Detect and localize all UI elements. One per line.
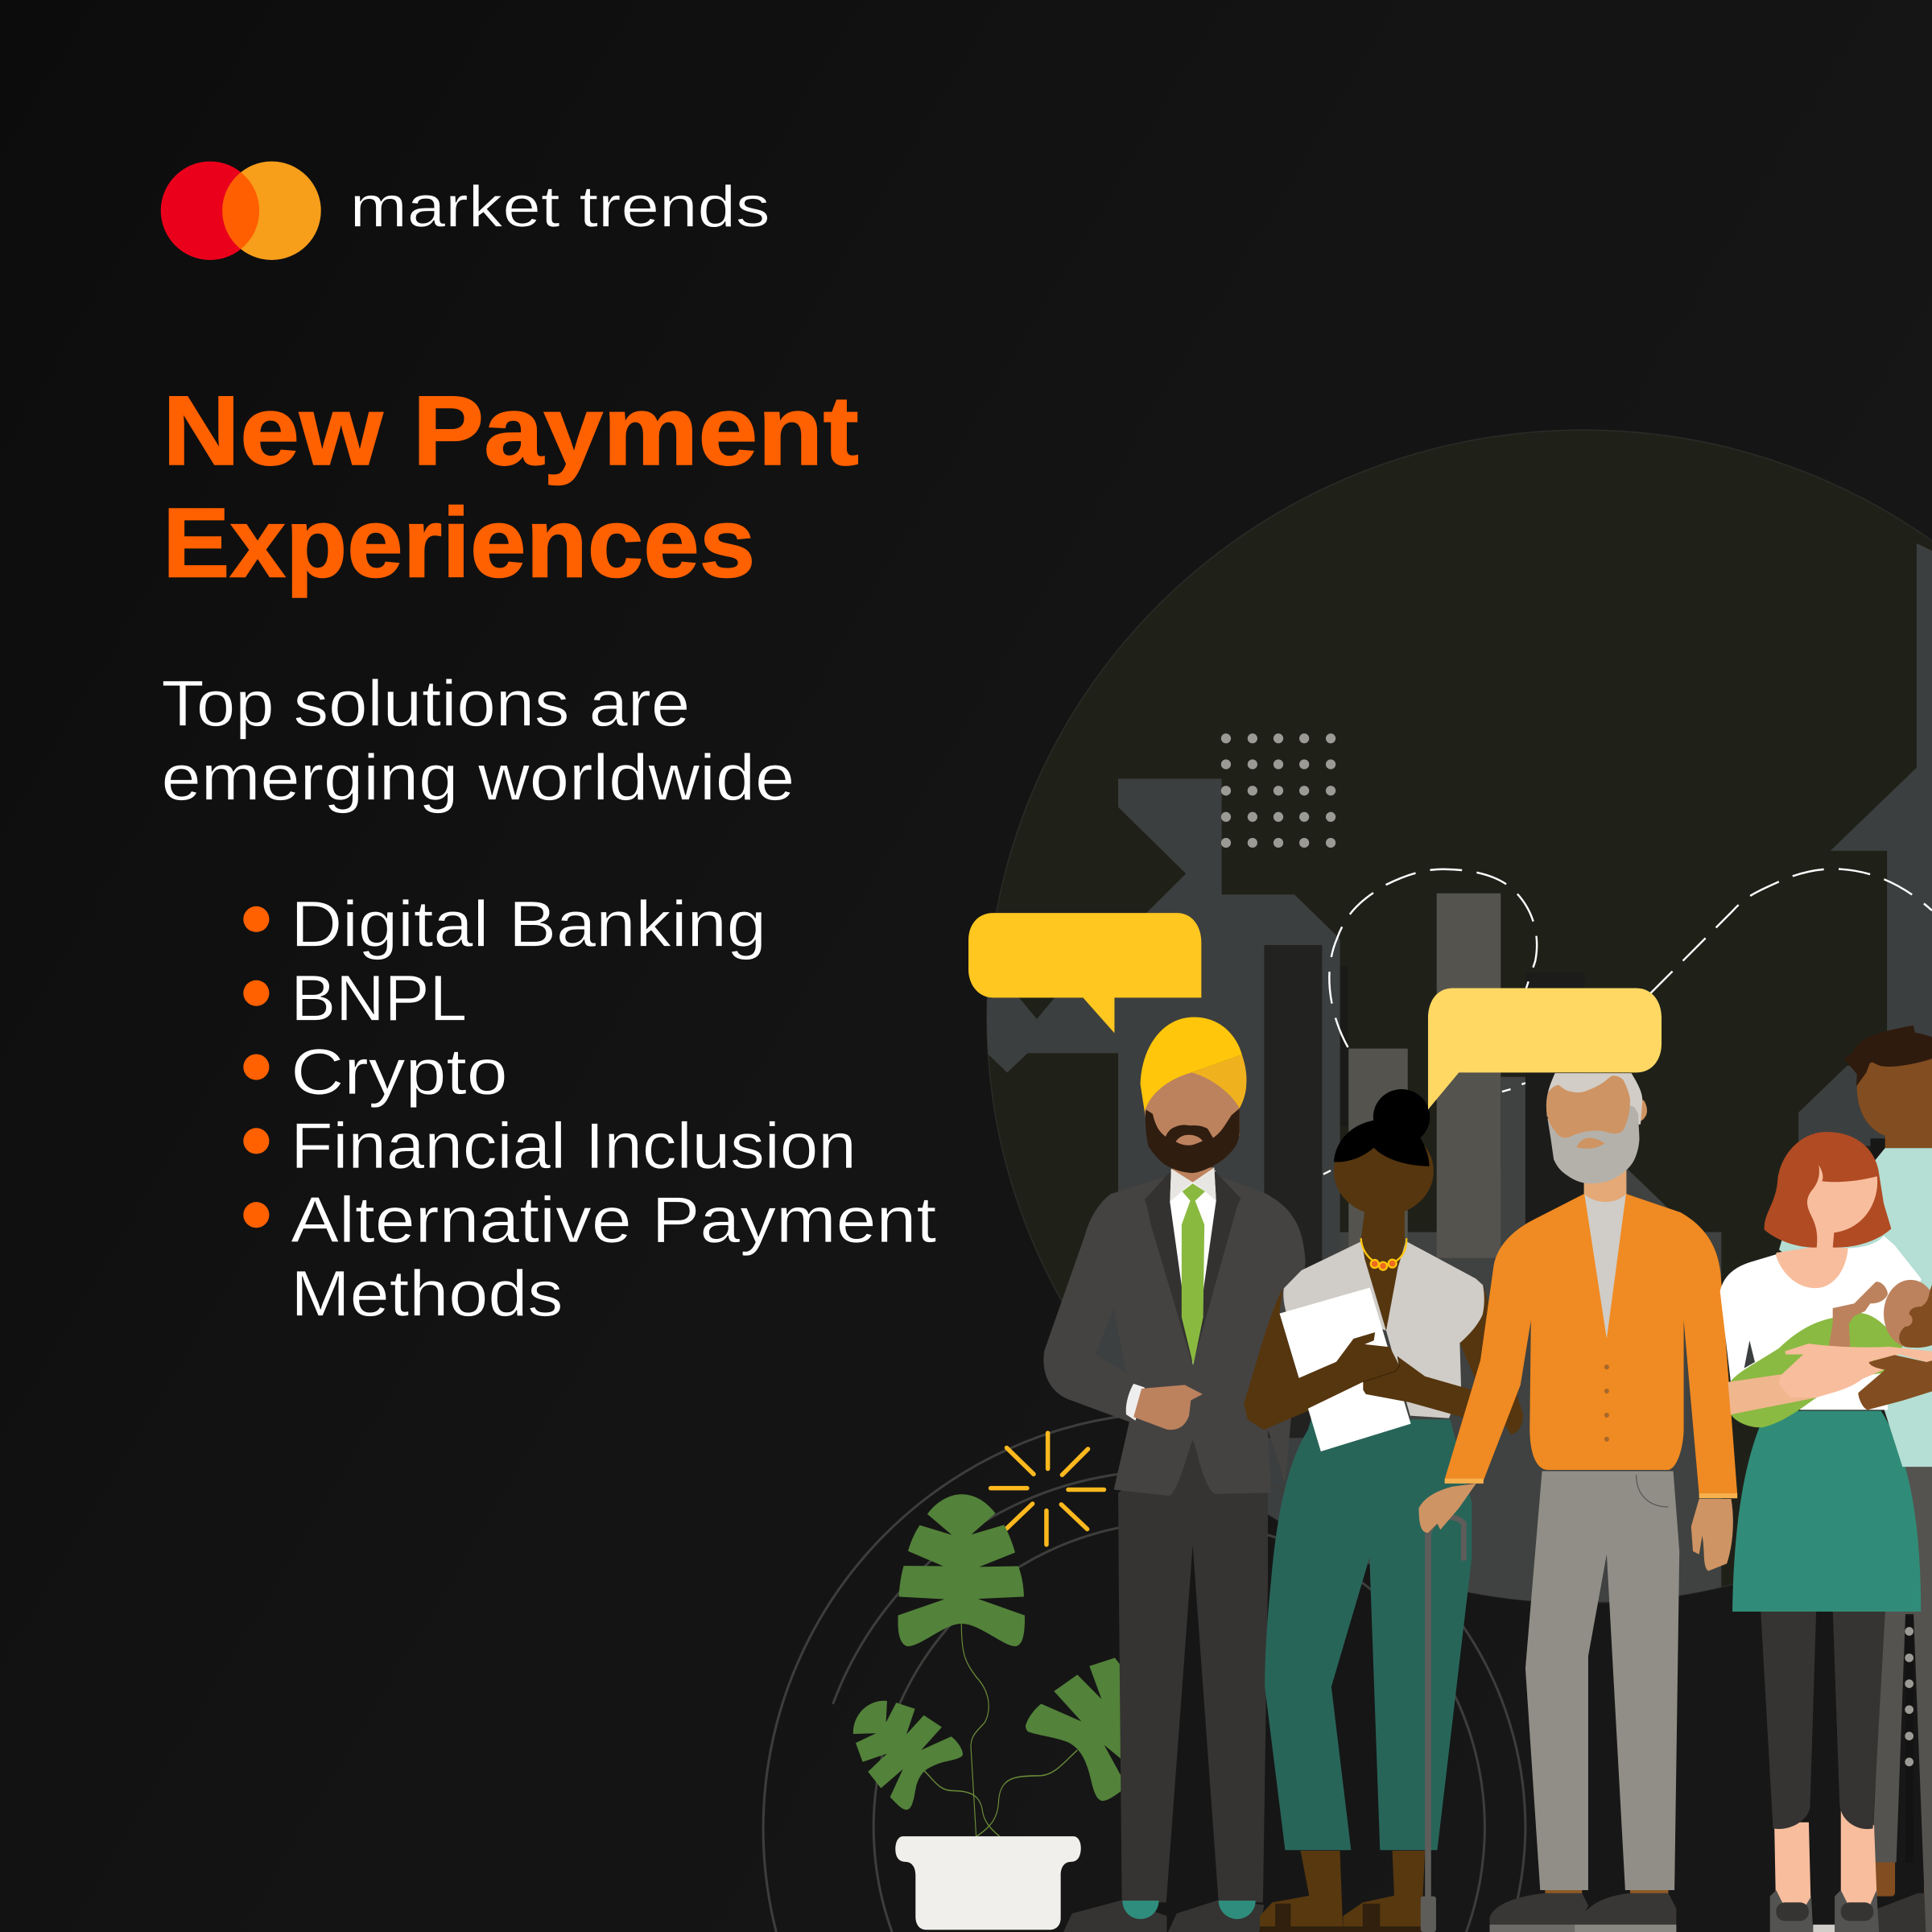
concentric ring lines [763,1412,1525,1932]
bullet list: Alternative Payment [291,1184,936,1257]
person: elderly man in orange cardigan with cane [1445,1073,1737,1932]
person: woman holding baby and partner upper body [1720,1026,1932,1467]
woman hair [1765,1132,1891,1248]
bullet list: Methods [291,1258,563,1331]
cane [1418,1484,1476,1932]
baby hair [1899,1285,1932,1348]
city skyline [987,543,1932,1602]
person: man in turban and suit [1043,1018,1306,1932]
partner arm [1858,1355,1932,1410]
neck and chest [1776,1247,1848,1288]
globe background [987,430,1932,1603]
dashed connector lines [1323,869,1932,1174]
plant pot [895,1836,1081,1930]
brand name: market trends [350,175,770,240]
subtitle: Top solutions are [162,668,690,741]
partner hair [1844,1026,1932,1087]
sparkle icon [991,1433,1104,1545]
baby arm [1829,1282,1888,1347]
bullet list: Financial Inclusion [291,1110,857,1183]
title [163,375,859,597]
bullet list [243,889,936,1331]
people group [1043,1018,1932,1932]
bullet list: Digital Banking [291,889,766,961]
right leaf [1026,1657,1127,1801]
subtitle: emerging worldwide [162,741,795,814]
baby blanket [1731,1313,1902,1427]
title: New Payment [163,375,859,485]
speech bubble: right [1428,989,1662,1109]
mother upper arm shade [1728,1374,1817,1414]
plant stems [924,1624,1077,1836]
baby head [1884,1280,1932,1348]
bullet list: Crypto [291,1036,508,1108]
speech bubble: left [968,913,1201,1033]
person: man in mint shirt, lower body [1872,1466,1932,1932]
person: woman with bun and documents [1244,1089,1523,1932]
mint shirt [1779,1148,1932,1467]
big leaf [898,1494,1025,1646]
title: Experiences [163,487,755,597]
dark gap at arm [1744,1340,1755,1368]
person: woman legs and skirt [1732,1411,1921,1932]
logo [161,162,321,260]
subtitle [162,668,795,814]
dot grid [1221,733,1335,848]
woman face [1807,1165,1877,1248]
potted plant [853,1494,1127,1930]
mother arm [1728,1344,1932,1414]
partner head [1857,1059,1932,1148]
white t-shirt [1720,1236,1922,1410]
bullet list: BNPL [291,962,467,1034]
left leaf [853,1701,963,1810]
